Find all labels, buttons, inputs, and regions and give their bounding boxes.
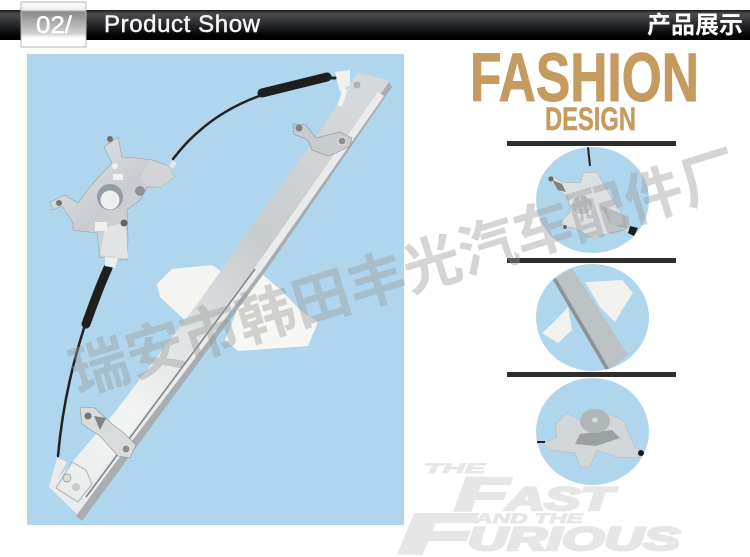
lower bracket — [80, 407, 136, 458]
title: fashion design: DESIGN — [545, 101, 636, 137]
logo: the fast and the furious: AND THE — [473, 510, 584, 526]
title: fashion design — [470, 39, 699, 137]
detail circle: motor side — [536, 378, 649, 485]
chinese heading: 产品展示 — [647, 12, 743, 39]
detail circle: slider — [536, 264, 649, 372]
divider bar 2 — [507, 258, 676, 263]
section heading: Product Show — [104, 11, 261, 38]
upper bracket — [293, 124, 352, 156]
cable — [58, 77, 335, 456]
logo: the fast and the furious: URIOUS — [468, 521, 681, 557]
panel: main product photo — [27, 54, 404, 525]
logo: the fast and the furious: AST — [504, 481, 617, 517]
detail views column — [507, 141, 676, 485]
header bar — [0, 2, 750, 47]
logo: the fast and the furious — [400, 460, 681, 557]
section number tab — [21, 2, 86, 47]
watermark: 瑞安市韩田丰光汽车配件厂 — [63, 140, 747, 407]
rail — [49, 70, 392, 521]
logo: the fast and the furious: THE — [424, 460, 486, 476]
logo: the fast and the furious: F — [455, 468, 512, 520]
motor housing — [50, 136, 177, 268]
white plastic slider — [157, 265, 318, 351]
detail circle: motor top — [536, 147, 649, 253]
divider bar 3 — [507, 372, 676, 377]
section number tab: 02/ — [36, 12, 72, 39]
divider bar 1 — [507, 141, 676, 146]
